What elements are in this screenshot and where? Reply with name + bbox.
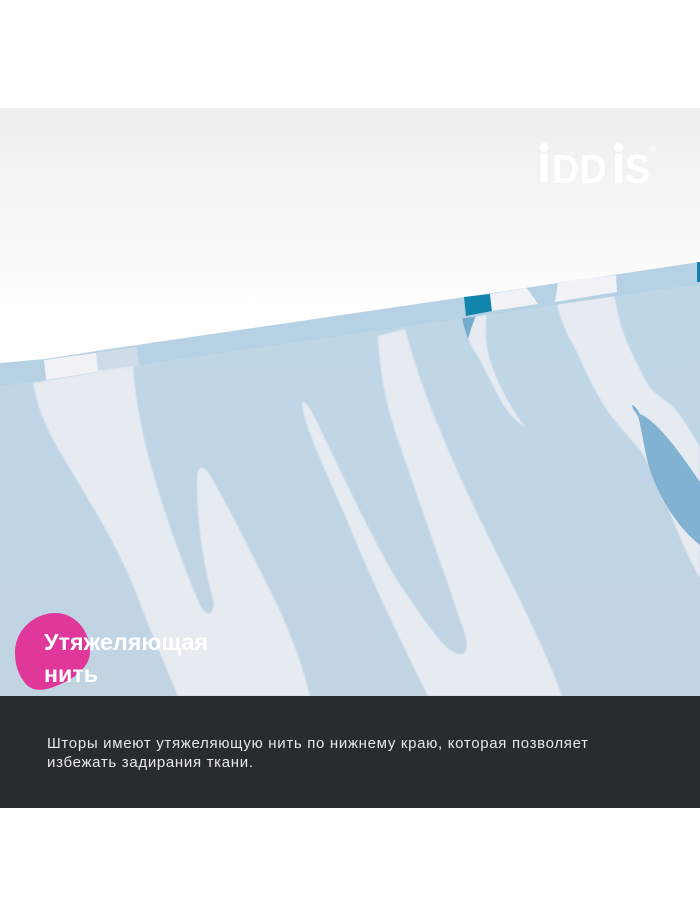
photo: curtain fabric close-up bbox=[0, 108, 700, 696]
white stripe with notch, left bbox=[33, 366, 310, 696]
blue leaf bbox=[632, 405, 700, 545]
teal leaf under the hem bbox=[462, 315, 476, 339]
caption text: Шторы имеют утяжеляющую нить по нижнему краю, которая позволяет bbox=[47, 735, 588, 752]
hem blue triangle bbox=[526, 283, 558, 290]
white stripe, right bbox=[557, 290, 700, 578]
hem band bbox=[0, 262, 700, 386]
wall background bbox=[0, 108, 700, 232]
white stripe with notch, centre bbox=[302, 329, 562, 696]
hem white segment, right bbox=[555, 275, 617, 302]
hem pale segment, left bbox=[96, 347, 139, 371]
heading bbox=[44, 629, 208, 687]
blue curtain cloth bbox=[0, 280, 700, 696]
logo i stems and dots bbox=[540, 143, 623, 183]
hem white segment, left bbox=[44, 347, 139, 380]
logo: IDDIS: iDDiS bbox=[539, 147, 650, 192]
white hook stripe bbox=[468, 314, 526, 428]
heading: Утяжеляющая bbox=[44, 629, 208, 655]
registered mark: ® bbox=[649, 144, 657, 155]
pink blob accent bbox=[15, 613, 90, 690]
heading: нить bbox=[44, 661, 98, 687]
caption text: избежать задирания ткани. bbox=[47, 754, 253, 771]
hem white segment, middle bbox=[490, 288, 538, 311]
dark caption panel bbox=[0, 696, 700, 808]
hem teal segment bbox=[464, 294, 492, 316]
hem teal tip, right edge bbox=[697, 262, 700, 282]
caption text bbox=[47, 735, 588, 771]
